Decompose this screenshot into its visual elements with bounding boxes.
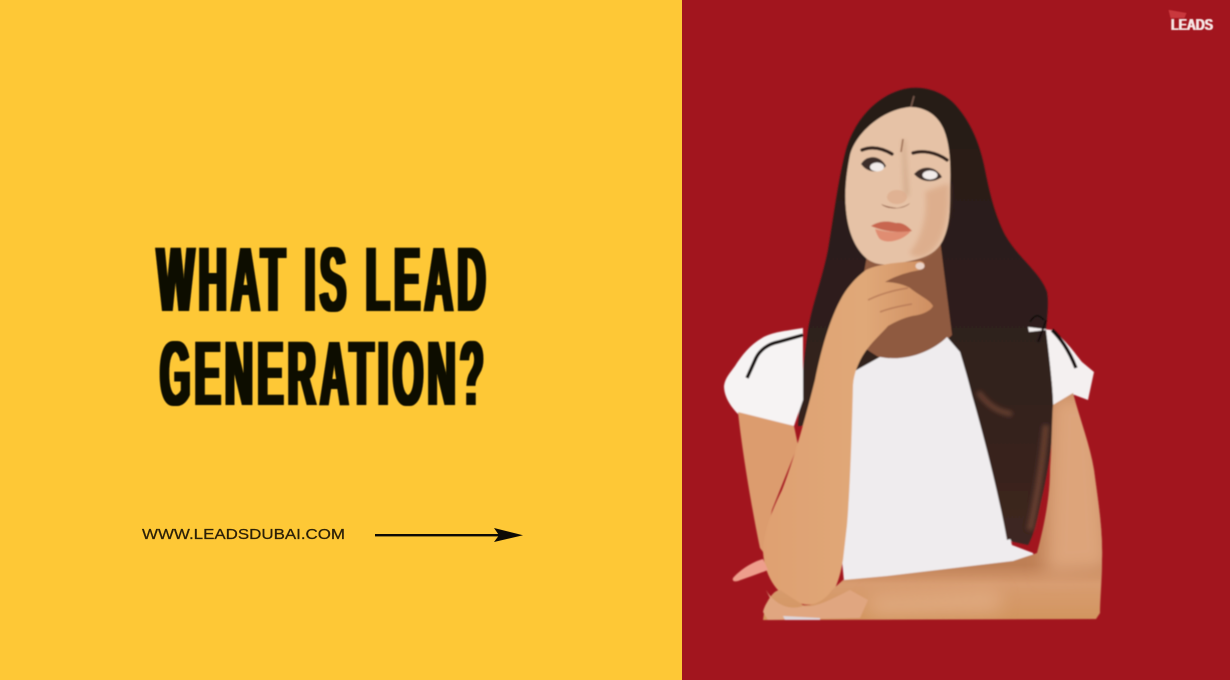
- sleeve stripes: [747, 316, 1076, 378]
- upper part of right arm tone: [1045, 395, 1110, 575]
- logo: [1169, 10, 1213, 34]
- finger shadow lines: [868, 288, 912, 312]
- neck: [852, 240, 952, 359]
- logo: LEADS: [1171, 17, 1213, 34]
- upper arm left: [738, 412, 798, 552]
- lower arm: [763, 393, 1102, 620]
- forearm and hand at chin: [763, 261, 933, 605]
- right sleeve: [1028, 327, 1094, 406]
- left sleeve: [724, 328, 803, 426]
- hair part: [911, 96, 914, 107]
- illustration: thoughtful woman: [724, 88, 1110, 620]
- left eye: [861, 157, 886, 172]
- face: [845, 107, 950, 265]
- arm highlight: [870, 590, 1000, 616]
- nose: [881, 190, 910, 208]
- text: WHAT IS LEAD: [157, 229, 490, 331]
- panel: yellow left background: [0, 0, 682, 680]
- forehead crease: [901, 139, 903, 152]
- right eye: [914, 168, 942, 181]
- title: [157, 229, 490, 425]
- nose bridge shadow: [902, 140, 909, 196]
- hair brown strands: [978, 392, 1046, 530]
- fingernail: [916, 262, 924, 270]
- arrow: [375, 528, 523, 542]
- hair lower lock over shirt: [958, 330, 1053, 545]
- panel: red right background: [682, 0, 1230, 680]
- white hem at bottom: [783, 616, 820, 620]
- eyebrows: [862, 148, 947, 160]
- pink fingertip: [733, 559, 768, 581]
- cheek warm tone: [910, 184, 949, 257]
- lips: [871, 221, 912, 242]
- shirt torso: [842, 337, 1034, 582]
- hair back: [798, 88, 1053, 545]
- text: GENERATION?: [160, 323, 488, 425]
- hand fingers: [763, 590, 868, 620]
- website url: WWW.LEADSDUBAI.COM: [142, 527, 345, 543]
